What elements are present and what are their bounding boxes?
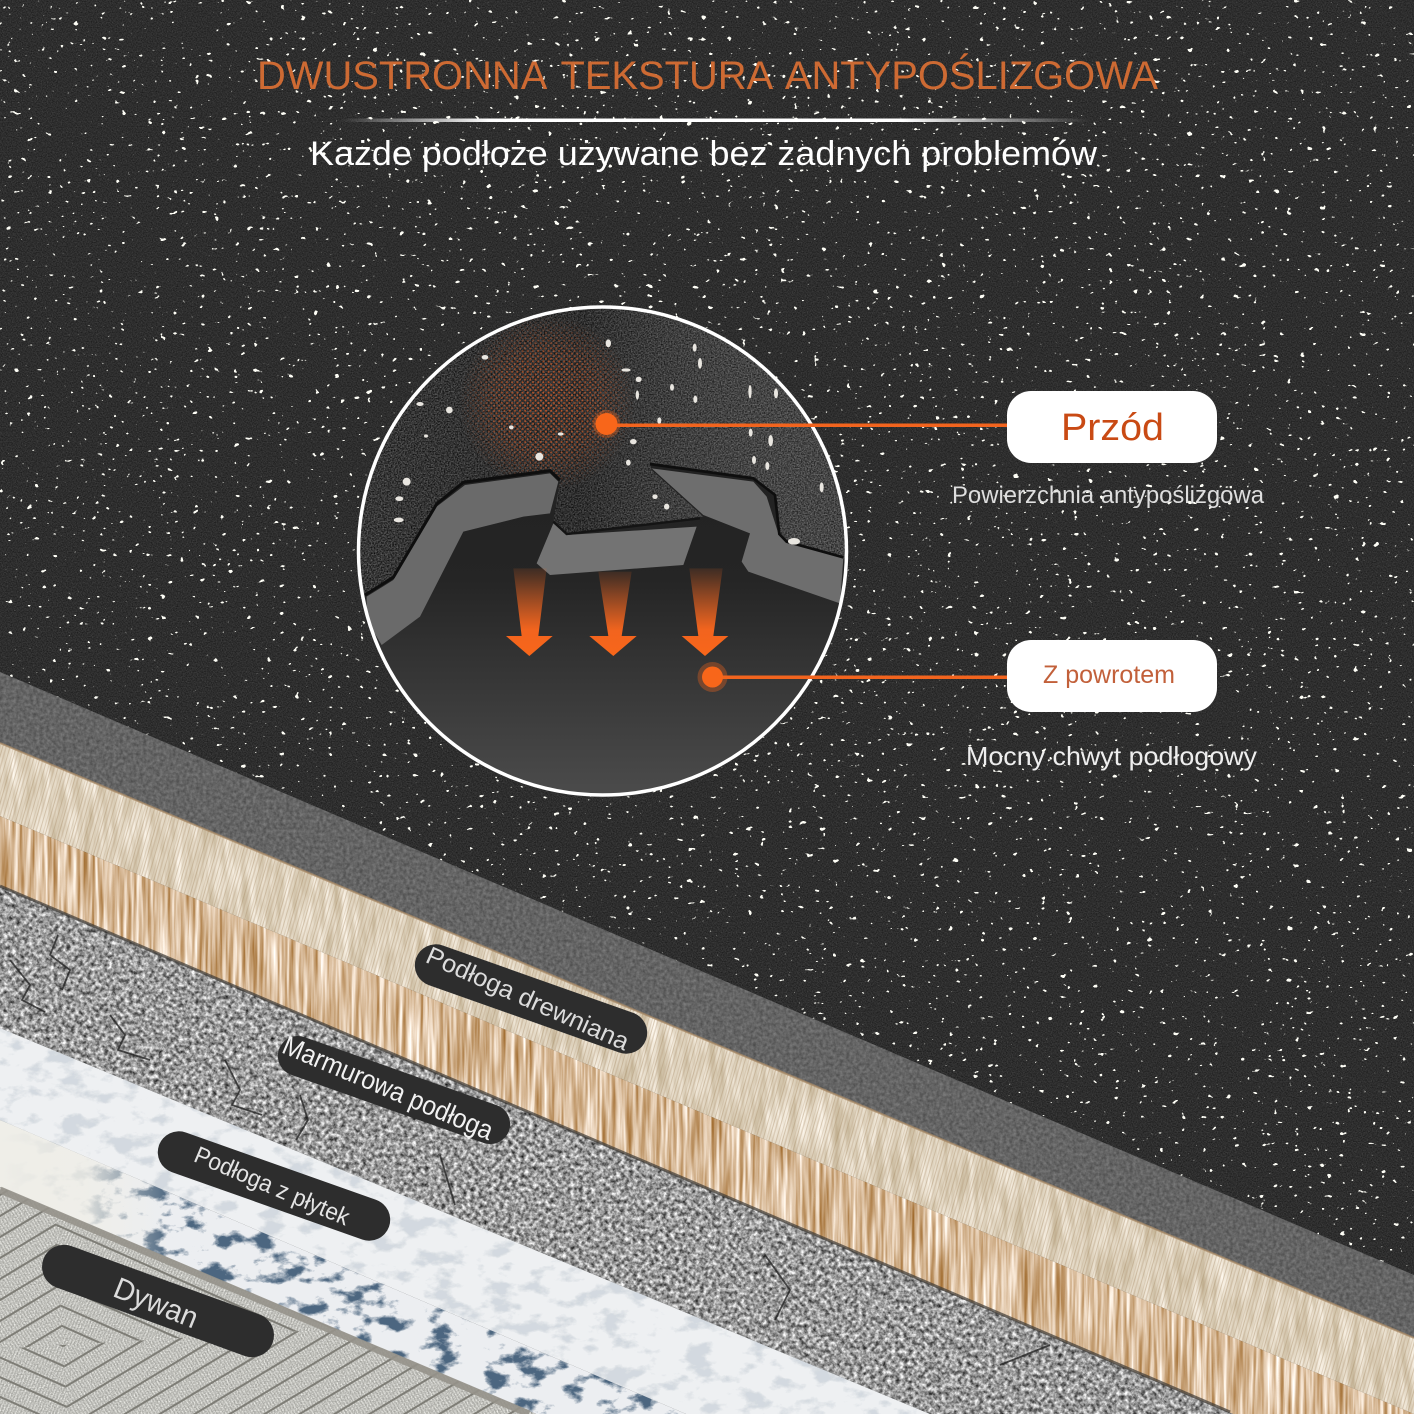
subtitle: Każde podłoże używane bez żadnych problemów: [310, 135, 1097, 173]
magnified circle: interlocking joint detail: [350, 300, 860, 810]
front marker dot and leader line: [592, 410, 1009, 438]
arrow: left pressure: [506, 568, 553, 656]
title divider: [340, 118, 1090, 122]
mat top surface inside circle: [360, 308, 845, 594]
wooden floor layer: [0, 740, 1414, 1414]
halftone orange glow: [462, 319, 632, 487]
label pill: front: [1007, 391, 1217, 463]
marble floor layer: [0, 1020, 940, 1414]
back description: Mocny chwyt podłogowy: [966, 741, 1257, 771]
carpet layer: [0, 1180, 540, 1414]
back marker dot and leader line: [698, 662, 1009, 692]
concrete floor layer: [0, 880, 1240, 1414]
label pill: front: Przód: [1061, 407, 1164, 449]
floor label: carpet: Dywan: [109, 1272, 203, 1335]
floor label: tile: Podłoga z płytek: [190, 1142, 354, 1232]
arrow: right pressure: [682, 568, 728, 656]
rubber mat side edge: [0, 660, 1414, 1350]
floor label: marble: Marmurowa podłoga: [278, 1030, 499, 1146]
front description: Powierzchnia antypoślizgowa: [952, 482, 1265, 509]
floor label: tile: [152, 1125, 396, 1247]
title: DWUSTRONNA TEKSTURA ANTYPOŚLIZGOWA: [257, 52, 1158, 98]
joint foam edges: [365, 339, 843, 656]
floor label: carpet: [36, 1239, 280, 1363]
white rubber flecks inside circle: [394, 339, 824, 545]
label pill: back: Z powrotem: [1043, 661, 1175, 689]
floor label: wood: Podłoga drewniana: [422, 942, 633, 1056]
label pill: back: [1007, 640, 1217, 712]
arrow: middle pressure: [589, 572, 637, 656]
